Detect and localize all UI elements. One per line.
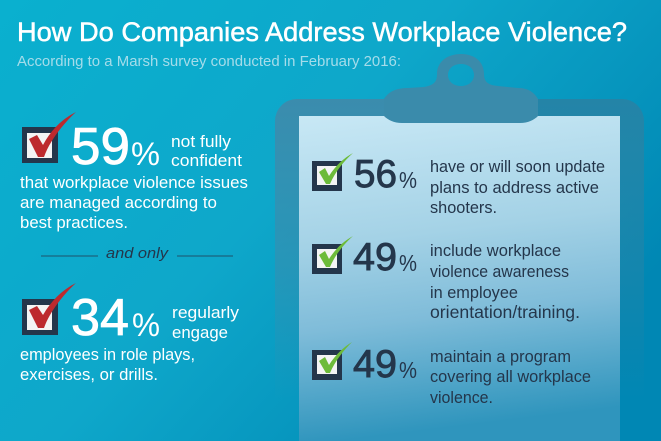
description: orientation/training. — [430, 302, 580, 322]
description: not fully confident: not fully — [171, 132, 232, 151]
description: covering all workplace — [430, 368, 591, 386]
value 34%: 34 — [71, 289, 129, 347]
title: How Do Companies Address Workplace Violence? — [17, 17, 627, 47]
value 49%: 49 — [353, 343, 397, 386]
divider: and only: and only — [106, 245, 170, 262]
description: that workplace: best practices. — [20, 213, 128, 232]
icon: green check box — [312, 153, 353, 191]
value 59% — [71, 118, 160, 176]
description: have or will soon update — [430, 158, 605, 176]
description: regularly engage — [172, 303, 240, 342]
description: not fully confident: confident — [171, 151, 242, 170]
clipboard board — [275, 99, 644, 441]
description — [430, 242, 580, 322]
value 49%: 49 — [353, 236, 397, 279]
description: employees: exercises, or drills. — [20, 365, 158, 384]
value 56% — [354, 153, 417, 196]
stat: 59 percent — [20, 112, 248, 232]
value 56%: 56 — [354, 153, 397, 196]
value 49% — [353, 343, 417, 386]
clipboard clip — [384, 54, 538, 123]
icon: red check box — [22, 283, 76, 335]
clipboard paper — [299, 116, 620, 441]
description: that workplace — [20, 173, 248, 232]
icon: green check box — [312, 236, 353, 274]
description: violence. — [430, 389, 493, 407]
item: 49 percent program — [312, 342, 591, 407]
description — [430, 348, 591, 407]
description: plans to address active — [430, 179, 599, 197]
description: that workplace: are managed according to — [20, 193, 217, 212]
value 34% — [71, 289, 160, 347]
description: shooters. — [430, 199, 497, 217]
subtitle: According to a Marsh survey conducted in February 2016: — [17, 53, 401, 70]
value 49% — [353, 236, 417, 279]
description: regularly engage: engage — [172, 323, 228, 342]
description: regularly engage: regularly — [172, 303, 240, 322]
description — [430, 158, 605, 217]
value 49%: % — [399, 250, 417, 276]
value 34%: % — [132, 307, 160, 343]
description: employees: employees in role plays, — [20, 345, 195, 364]
stat: 34 percent — [20, 283, 240, 384]
clipboard — [275, 54, 644, 441]
description: not fully confident — [171, 132, 242, 170]
item: 49 percent training — [312, 236, 580, 322]
icon: green check box — [312, 342, 352, 380]
item: 56 percent — [312, 153, 605, 217]
value 56%: % — [399, 167, 417, 193]
description: maintain a program — [430, 348, 571, 366]
description: in employee — [430, 284, 518, 302]
value 59%: 59 — [71, 118, 130, 176]
description: include workplace — [430, 242, 561, 260]
description: violence awareness — [430, 263, 569, 281]
icon: red check box — [22, 112, 76, 163]
description: that workplace: that workplace violence issues — [20, 173, 248, 192]
description: employees — [20, 345, 195, 384]
value 59%: % — [131, 136, 160, 172]
value 49%: % — [399, 357, 417, 383]
